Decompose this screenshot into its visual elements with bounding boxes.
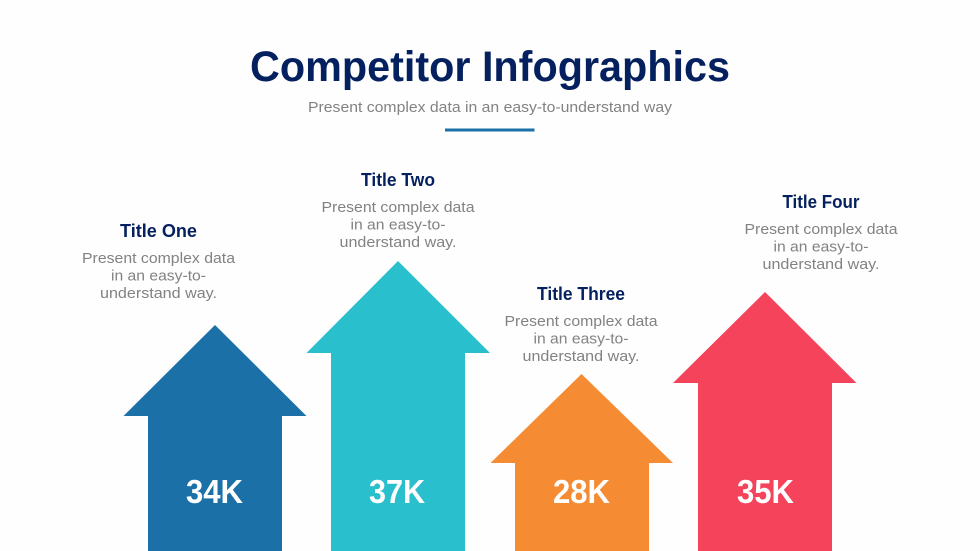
subtitle: Present complex data in an easy-to-understand way	[308, 99, 673, 116]
description: title four: understand way.	[762, 256, 880, 273]
arrow: teal	[306, 261, 490, 551]
value: 37K: 37K	[369, 473, 425, 510]
heading: title two: Title Two	[361, 169, 435, 190]
description: title four	[744, 221, 898, 273]
heading: title one: Title One	[120, 220, 197, 241]
description: title two: Present complex data	[322, 199, 475, 216]
arrow: blue	[124, 325, 306, 551]
description: title two: in an easy-to-	[350, 216, 446, 234]
column: title four	[673, 191, 898, 551]
description: title one: Present complex data	[82, 250, 236, 267]
description: title three: Present complex data	[504, 313, 658, 330]
description: title one: understand way.	[100, 285, 217, 302]
description: title three: understand way.	[522, 348, 640, 365]
heading: title four: Title Four	[782, 191, 860, 212]
description: title two: understand way.	[340, 234, 456, 251]
heading: title three: Title Three	[537, 283, 625, 304]
value: 35K: 35K	[737, 473, 794, 510]
column: title three	[490, 283, 673, 551]
title: Competitor Infographics	[250, 43, 730, 91]
description: title three: in an easy-to-	[534, 330, 628, 348]
arrow: red	[673, 292, 856, 551]
title underline	[445, 128, 534, 132]
column: title two	[306, 169, 490, 551]
value: 28K: 28K	[553, 473, 610, 510]
column: title one	[82, 220, 306, 551]
value: 34K: 34K	[186, 473, 243, 510]
description: title four: in an easy-to-	[774, 238, 868, 256]
arrow: orange	[490, 374, 673, 551]
description: title two	[322, 199, 475, 251]
description: title three	[504, 313, 658, 365]
description: title one: in an easy-to-	[111, 268, 206, 284]
description: title one	[82, 250, 236, 302]
description: title four: Present complex data	[744, 221, 898, 238]
